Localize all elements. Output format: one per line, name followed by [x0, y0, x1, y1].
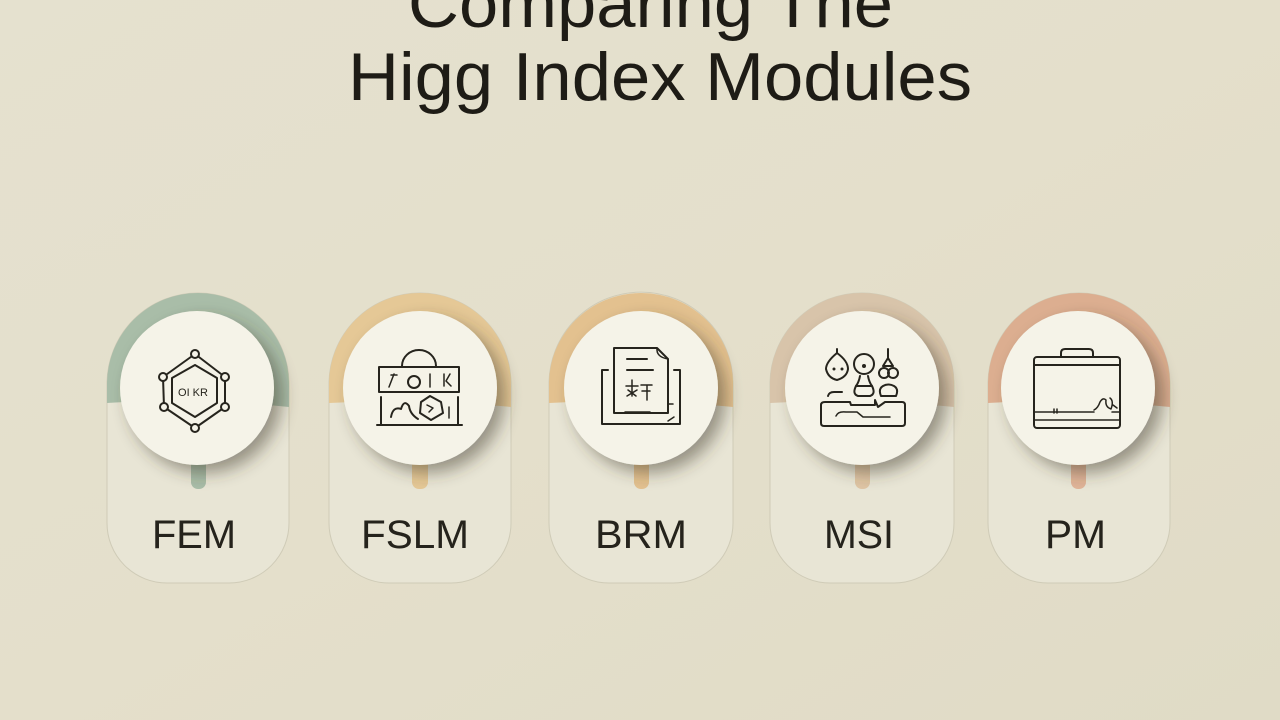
panel: PM	[988, 293, 1170, 583]
label: PM: PM	[1045, 513, 1106, 557]
label: MSI: MSI	[824, 513, 894, 557]
label: FEM: FEM	[152, 513, 236, 557]
title	[348, 0, 972, 115]
icon: FEM hexagon network: OI KR	[178, 387, 208, 399]
panel: BRM	[549, 292, 733, 583]
icon: FEM hexagon network	[159, 350, 229, 432]
panel: MSI	[770, 293, 954, 583]
panel: FEM	[107, 293, 289, 583]
title: Higg Index Modules	[348, 39, 972, 115]
icon: FSLM facility	[377, 350, 462, 425]
icon: PM briefcase	[1034, 349, 1120, 428]
label: FSLM: FSLM	[361, 513, 469, 557]
label: BRM: BRM	[595, 513, 687, 557]
panel: FSLM	[329, 293, 511, 583]
icon: MSI materials	[821, 349, 905, 426]
icon: BRM document tray	[602, 348, 680, 424]
